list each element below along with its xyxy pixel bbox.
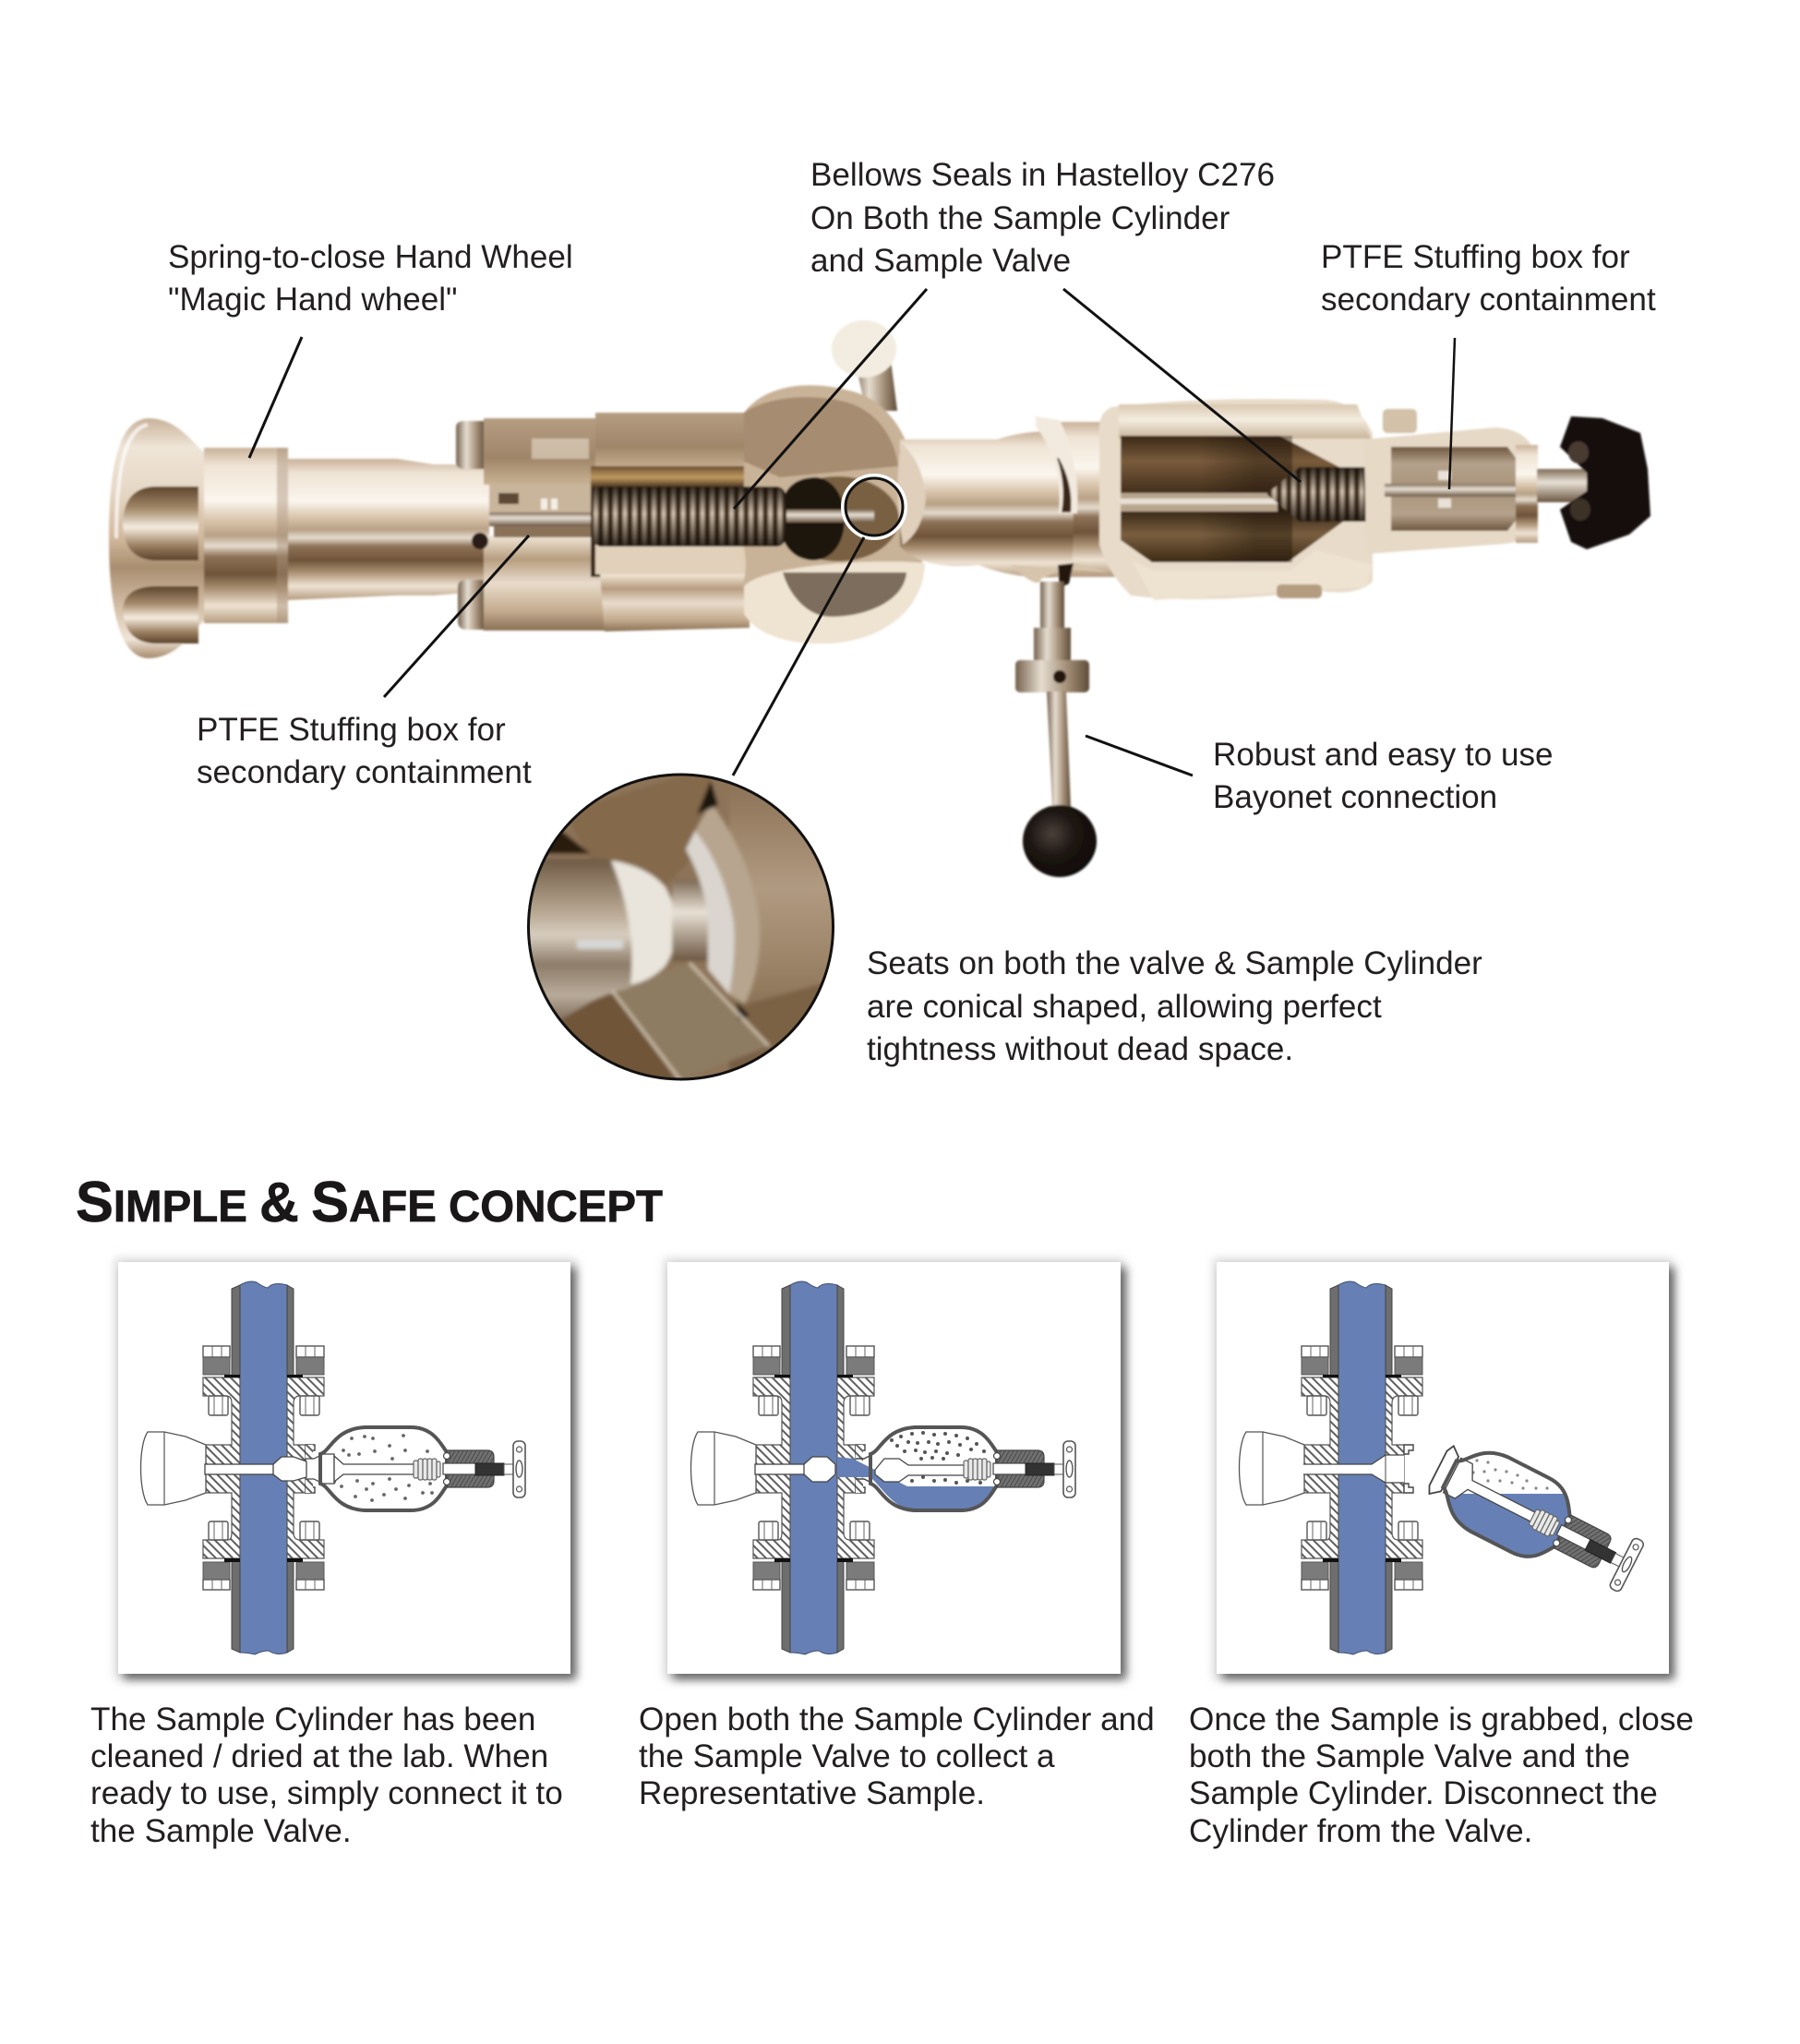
- label: PTFE stuffing box right: secondary containment: [1321, 282, 1656, 318]
- caption 3: Cylinder from the Valve.: [1189, 1813, 1532, 1849]
- caption 2: the Sample Valve to collect a: [639, 1738, 1055, 1774]
- label: hand wheel: "Magic Hand wheel": [168, 282, 457, 318]
- hand wheel collar and tube: [204, 448, 489, 623]
- bolts on cylinder: [1277, 409, 1417, 598]
- label: hand wheel: Spring-to-close Hand Wheel: [168, 239, 573, 275]
- label: bayonet connection: [1213, 737, 1554, 815]
- panel 3: cylinder disconnected: [1213, 1258, 1674, 1679]
- label: PTFE stuffing box left: [197, 712, 532, 790]
- bellows housing: stuffing box block: [456, 418, 605, 631]
- label: PTFE stuffing box right: [1321, 239, 1656, 318]
- knob shaft and black knob: [1537, 416, 1650, 549]
- callout circle on seat: [844, 476, 905, 537]
- caption 1: the Sample Valve.: [90, 1813, 352, 1849]
- caption 3: Sample Cylinder. Disconnect the: [1189, 1775, 1658, 1811]
- label: bellows seals: [810, 157, 1275, 279]
- label: conical seats: tightness without dead space.: [867, 1031, 1293, 1067]
- hand wheel bell: [109, 418, 204, 658]
- caption 2: Representative Sample.: [639, 1775, 985, 1811]
- upper and lower body: [591, 413, 780, 631]
- label: PTFE stuffing box left: PTFE Stuffing box for: [197, 712, 506, 748]
- right gland with window: [1364, 427, 1538, 554]
- label: bellows seals: and Sample Valve: [810, 243, 1071, 279]
- leader lines: [249, 289, 1455, 776]
- label: bayonet connection: Robust and easy to use: [1213, 737, 1554, 773]
- white knob on the clamp: [832, 320, 897, 411]
- label: bellows seals: On Both the Sample Cylinder: [810, 200, 1230, 236]
- main tube with bayonet slot: [897, 416, 1119, 577]
- label: conical seats: are conical shaped, allowing perfect: [867, 989, 1382, 1025]
- panel 2: sampling open: [664, 1258, 1126, 1679]
- caption 3: both the Sample Valve and the: [1189, 1738, 1630, 1774]
- caption 1: [90, 1701, 563, 1849]
- sample cylinder body with cutaway: [1099, 399, 1388, 600]
- panel 1: cylinder connected: [114, 1258, 576, 1679]
- caption 1: cleaned / dried at the lab. When: [90, 1738, 548, 1774]
- ball-shaped clamp: [742, 385, 925, 643]
- label: PTFE stuffing box right: PTFE Stuffing box for: [1321, 239, 1630, 275]
- caption 3: Once the Sample is grabbed, close: [1189, 1701, 1694, 1737]
- label: PTFE stuffing box left: secondary containment: [197, 754, 532, 790]
- magnified seat detail circle: [526, 766, 840, 1085]
- label: conical seats: Seats on both the valve & Sample Cylinder: [867, 945, 1482, 981]
- label: conical seats: [867, 945, 1482, 1067]
- caption 1: ready to use, simply connect it to: [90, 1775, 563, 1811]
- label: bellows seals: Bellows Seals in Hastelloy C276: [810, 157, 1275, 193]
- bayonet handle: [1011, 563, 1108, 877]
- heading: Simple & Safe concept: SIMPLE & SAFE CONCEPT: [76, 1171, 663, 1234]
- caption 2: [639, 1701, 1155, 1811]
- caption 3: [1189, 1701, 1694, 1849]
- product photo: cutaway sampling valve and cylinder: [109, 320, 1650, 877]
- caption 2: Open both the Sample Cylinder and: [639, 1701, 1155, 1737]
- central bellows: [593, 487, 786, 547]
- caption 1: The Sample Cylinder has been: [90, 1701, 535, 1737]
- label: bayonet connection: Bayonet connection: [1213, 779, 1497, 815]
- label: hand wheel: [168, 239, 573, 318]
